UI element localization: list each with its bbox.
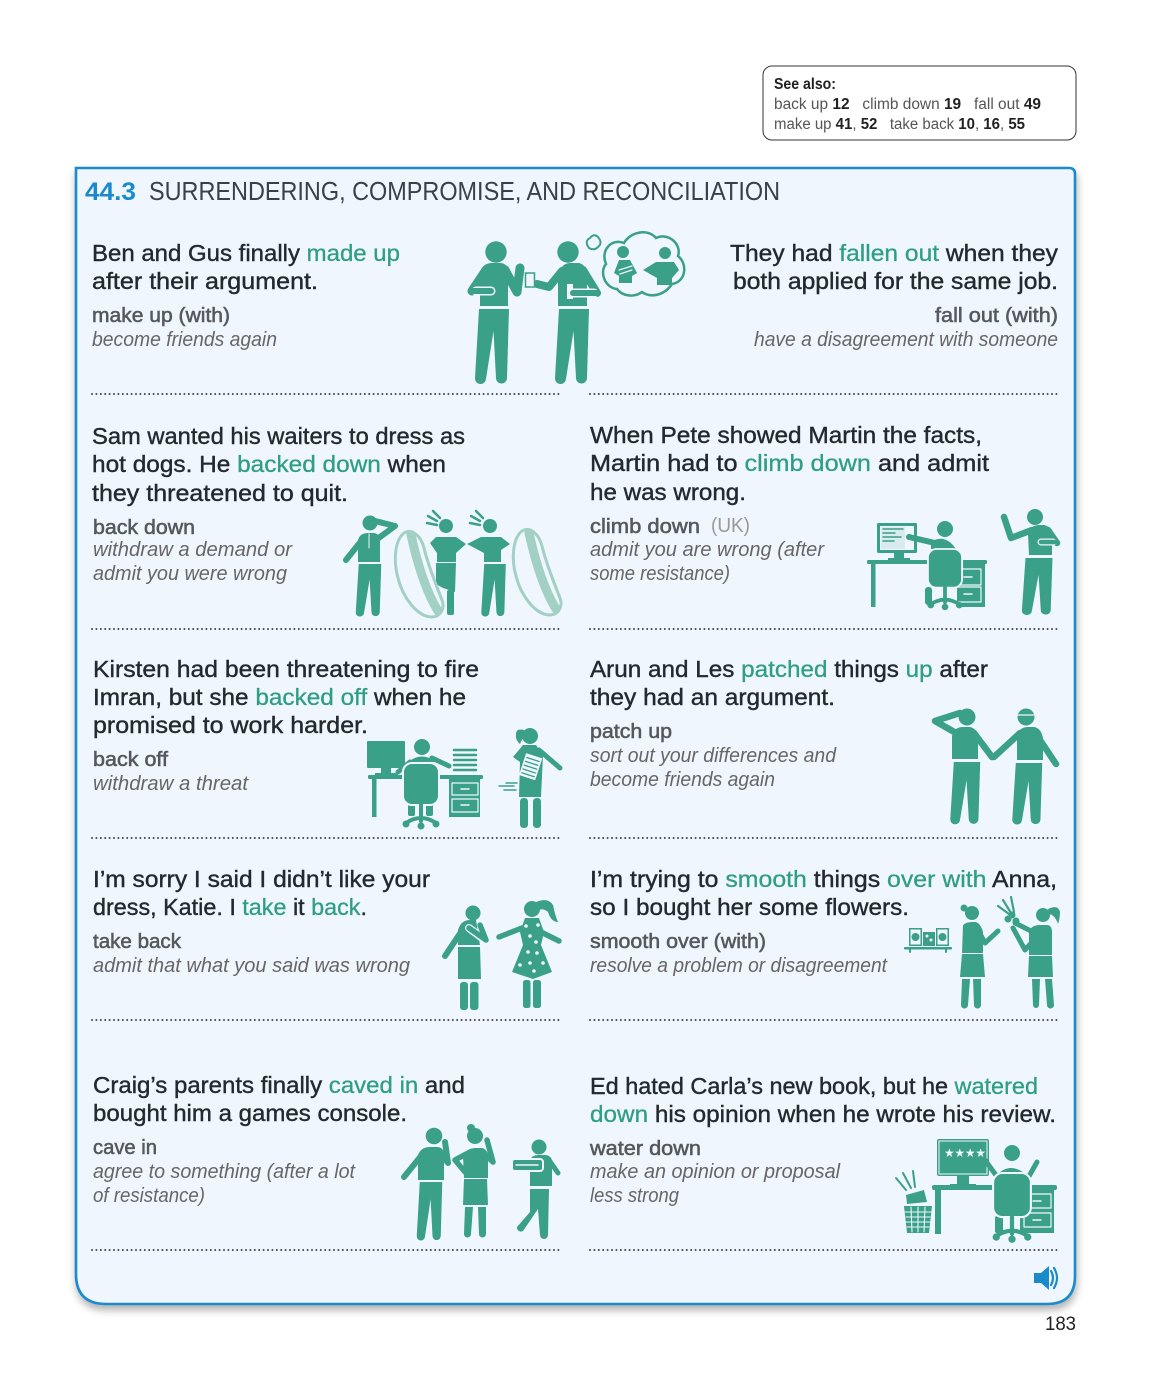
text block: caved in: cave in (93, 1137, 157, 1159)
text block: backed off: promised to work harder. (93, 712, 368, 738)
text block: patched up (590, 656, 988, 791)
icon: shelf and woman giving flowers (904, 897, 1060, 1009)
text block: smooth over: so I bought her some flowers. (590, 894, 909, 920)
text block: patched up: Arun and Les patched things up after (590, 656, 988, 682)
text block: climb down: some resistance) (590, 563, 730, 585)
text block: patched up: they had an argument. (590, 684, 835, 710)
text block: fallen out: have a disagreement with someone (754, 329, 1058, 351)
icon: apologetic man and woman in spotted dress (445, 900, 559, 1010)
text block: caved in (93, 1072, 465, 1207)
text block: fallen out: fall out (with) (935, 305, 1058, 327)
heading: section number and title: SURRENDERING, COMPROMISE, AND RECONCILIATION (149, 176, 780, 206)
text block: smooth over: resolve a problem or disagreement (590, 955, 888, 977)
icon: reviewer at desk with waste basket: ★★★★ (944, 1146, 986, 1160)
icon: reviewer at desk with waste basket (896, 1139, 1057, 1243)
icon: man at desk and man admitting (867, 509, 1057, 615)
text block: watered down: down his opinion when he wrote his review. (590, 1101, 1056, 1127)
text block: climb down: Martin had to climb down and admit (590, 450, 990, 476)
text block: patched up: sort out your differences and (590, 745, 837, 767)
text block: caved in: bought him a games console. (93, 1100, 407, 1126)
text block: made up: make up (with) (92, 305, 230, 327)
see also box (763, 66, 1076, 140)
text block: made up (92, 240, 400, 351)
text block: climb down: climb down (590, 516, 700, 538)
text block: backed down: admit you were wrong (93, 563, 287, 585)
see also box: See also: (774, 76, 836, 93)
text block: take back: I’m sorry I said I didn’t like your (93, 866, 430, 892)
text block: fallen out: They had fallen out when they (730, 240, 1059, 266)
text block: climb down: he was wrong. (590, 479, 746, 505)
text block: climb down: (UK) (711, 515, 750, 537)
text block: smooth over (590, 866, 1057, 977)
text block: climb down: admit you are wrong (after (590, 539, 825, 561)
icon: parents and son with games console (404, 1124, 558, 1241)
text block: patched up: become friends again (590, 769, 775, 791)
text block: caved in: of resistance) (93, 1185, 205, 1207)
see also box: back up 12 climb down 19 fall out 49 (774, 96, 1041, 113)
icon: boss and waiters in hot dog costumes (346, 511, 561, 617)
text block: made up: become friends again (92, 329, 277, 351)
text block: backed down (92, 423, 465, 585)
text block: caved in: agree to something (after a lot (93, 1161, 356, 1183)
text block: backed down: hot dogs. He backed down when (92, 451, 446, 477)
text block: take back (93, 866, 430, 977)
text block: watered down (589, 1073, 1056, 1207)
text block: backed down: back down (93, 517, 195, 539)
text block: fallen out (730, 240, 1059, 351)
icon: boss at desk and employee walking away (367, 728, 560, 830)
text block: backed down: they threatened to quit. (92, 480, 348, 506)
text block: smooth over: smooth over (with) (590, 931, 766, 953)
text block: made up: after their argument. (92, 268, 318, 294)
icon: speaker audio (1034, 1266, 1057, 1290)
text block: smooth over: I’m trying to smooth things over with Anna, (590, 866, 1057, 892)
text block: backed down: withdraw a demand or (93, 539, 293, 561)
page number: 183 (1045, 1314, 1076, 1335)
text block: backed off: back off (93, 749, 168, 771)
text block: take back: take back (93, 931, 182, 953)
text block: backed off (93, 656, 479, 795)
text block: fallen out: both applied for the same job. (733, 268, 1058, 294)
text block: watered down: make an opinion or proposal (590, 1161, 841, 1183)
text block: backed off: Imran, but she backed off when he (93, 684, 466, 710)
text block: caved in: Craig’s parents finally caved in and (93, 1072, 465, 1098)
text block: take back: admit that what you said was wrong (93, 955, 410, 977)
heading: section number and title: 44.3 (85, 178, 136, 206)
panel: main section background (76, 168, 1075, 1304)
text block: made up: Ben and Gus finally made up (92, 240, 400, 266)
text block: backed down: Sam wanted his waiters to dress as (92, 423, 465, 449)
text block: climb down: When Pete showed Martin the facts, (590, 422, 982, 448)
text block: patched up: patch up (590, 721, 672, 743)
text block: watered down: less strong (590, 1185, 679, 1207)
icon: two friends with cups and thought bubble (472, 232, 684, 384)
see also box: make up 41, 52 take back 10, 16, 55 (774, 116, 1025, 133)
text block: watered down: water down (589, 1138, 701, 1160)
text block: backed off: Kirsten had been threatening to fire (93, 656, 479, 682)
text block: take back: dress, Katie. I take it back. (93, 894, 367, 920)
text block: watered down: Ed hated Carla’s new book, but he watered (590, 1073, 1038, 1099)
icon: two men holding hands (935, 708, 1056, 825)
text block: backed off: withdraw a threat (93, 773, 249, 795)
text block: climb down (590, 422, 990, 585)
